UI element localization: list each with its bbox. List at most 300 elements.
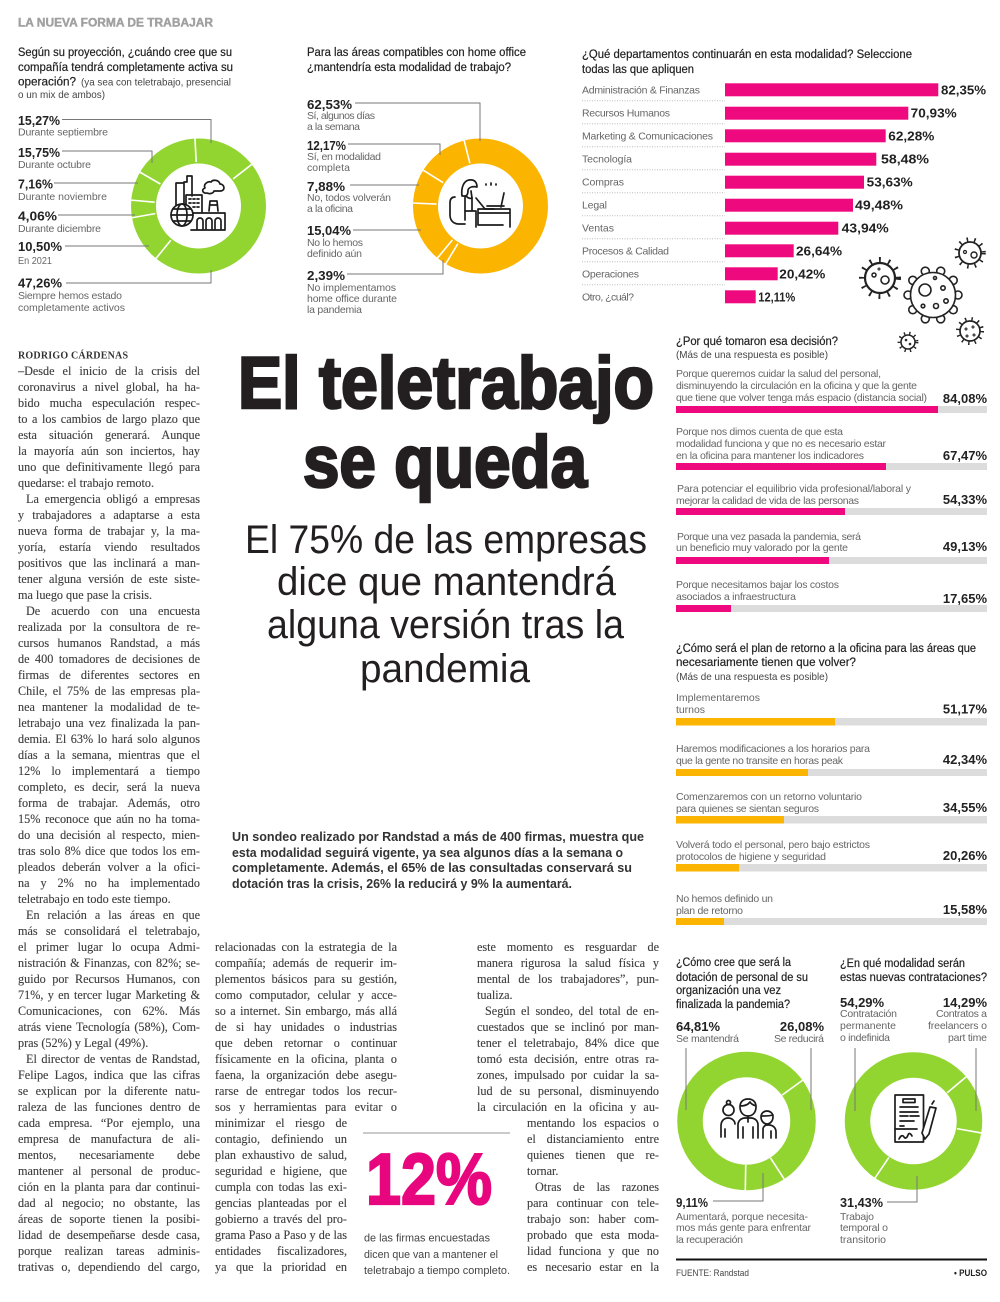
article column 1: tras solo 8% dice que todos los em- bbox=[18, 844, 200, 858]
value: septiembre: 15,27% bbox=[18, 113, 60, 128]
article column 3: tomó esta decisión, entre otras ra- bbox=[477, 1052, 659, 1066]
value: no definido: 15,04% bbox=[307, 223, 351, 238]
value: temporal: Trabajo bbox=[840, 1211, 874, 1223]
article column 2: plan exhaustivo de salud, bbox=[215, 1148, 347, 1162]
article column 1: trativas o, dependiendo del cargo, bbox=[18, 1260, 200, 1274]
question heading: organización una vez bbox=[676, 985, 781, 997]
row: Otro: 12,11% bbox=[758, 290, 796, 304]
virus bottom right bbox=[958, 319, 982, 343]
article column 1: yoría, estaría viendo resultados bbox=[18, 540, 200, 554]
heading: ¿Cómo será el plan de retorno a la oficina para las áreas que bbox=[676, 643, 976, 655]
value: no definido: definido aún bbox=[307, 248, 362, 260]
article column 1: se explican por la diferente natu- bbox=[18, 1084, 200, 1098]
value: algunos días: 62,53% bbox=[307, 97, 352, 112]
item: equilibrio vida profesional: Para potenciar el equilibrio vida profesional/laboral y bbox=[677, 483, 912, 495]
article column 1: pras (52%) y Legal (49%). bbox=[18, 1036, 148, 1050]
section header: LA NUEVA FORMA DE TRABAJAR bbox=[18, 18, 214, 30]
article column 3: tornar. bbox=[527, 1164, 558, 1178]
row: Tecnología bbox=[582, 152, 929, 166]
item: turnos bbox=[676, 692, 987, 726]
row: Procesos y Calidad bbox=[582, 244, 842, 258]
virus left bbox=[862, 260, 898, 296]
value: septiembre: Durante septiembre bbox=[18, 126, 108, 138]
question heading: ¿En qué modalidad serán bbox=[840, 958, 965, 970]
question heading: Según su proyección, ¿cuándo cree que su bbox=[18, 47, 232, 59]
article column 2: rarse de entregar todos los recur- bbox=[215, 1084, 397, 1098]
value: septiembre bbox=[18, 113, 108, 138]
row: Marketing: Marketing & Comunicaciones bbox=[582, 130, 713, 142]
row: Legal bbox=[582, 198, 903, 212]
article column 3: Según el sondeo, del total de en- bbox=[485, 1004, 659, 1018]
article column 2: plementos básicos para su gestión, bbox=[215, 972, 397, 986]
article column 1 bbox=[18, 364, 200, 1274]
value: volverán a la oficina: No, todos volverán bbox=[307, 192, 391, 204]
item: bajar costos: asociados a infraestructura bbox=[676, 591, 796, 603]
heading bbox=[676, 336, 838, 361]
question heading bbox=[582, 49, 912, 76]
article column 3: lidad funciona y que no bbox=[527, 1244, 659, 1258]
article column 3: este momento es resguardar de bbox=[477, 940, 659, 954]
row: Legal: 49,48% bbox=[855, 198, 903, 212]
value: noviembre: 7,16% bbox=[18, 176, 53, 192]
value: diciembre: Durante diciembre bbox=[18, 223, 101, 235]
row: Recursos Humanos: Recursos Humanos bbox=[582, 108, 670, 120]
article column 1: días a la semana, mientras que el bbox=[18, 748, 200, 762]
value: aumentará: mos más gente para enfrentar bbox=[676, 1222, 812, 1234]
article column 1: empresa de manufactura de ali- bbox=[18, 1132, 200, 1146]
question heading bbox=[307, 47, 526, 74]
value: modalidad completa: Sí, en modalidad bbox=[307, 151, 381, 163]
item: equilibrio vida profesional: 54,33% bbox=[943, 492, 987, 507]
value: modalidad completa: completa bbox=[307, 162, 350, 174]
value: permanente bbox=[840, 995, 897, 1044]
value: permanente: o indefinida bbox=[840, 1032, 890, 1044]
item: beneficio valorado: un beneficio muy valorado por la gente bbox=[676, 542, 848, 554]
row: Tecnología: 58,48% bbox=[881, 152, 929, 166]
callout: 12%: 12% bbox=[366, 1140, 492, 1220]
value: freelancers: freelancers o bbox=[928, 1020, 987, 1032]
article column 1: esta situación generará. Aunque bbox=[18, 428, 200, 442]
article column 3: mental de los trabajadores”, pun- bbox=[477, 972, 659, 986]
article column 1: quedarse: el trabajo remoto. bbox=[18, 476, 154, 490]
article column 3: mentando los espacios o bbox=[527, 1116, 659, 1130]
donut chart: dotación bbox=[690, 1064, 804, 1192]
article column 1: pleados deberán volver a la ofici- bbox=[18, 860, 200, 874]
value: 2021 bbox=[18, 239, 62, 267]
article column 1: nistración & Finanzas, con 82%; se- bbox=[18, 956, 200, 970]
value: permanente: Contratación bbox=[840, 1008, 897, 1020]
footer: source and brand: • PULSO bbox=[954, 1268, 987, 1279]
value: temporal: transitorio bbox=[840, 1234, 886, 1246]
subtitle: dice que mantendrá bbox=[277, 560, 617, 604]
panel: plan de retorno a la oficina bbox=[676, 643, 987, 925]
row: Procesos y Calidad: 26,64% bbox=[796, 244, 842, 258]
leader lines bbox=[54, 120, 211, 283]
value: aumentará: Aumentará, porque necesita- bbox=[676, 1211, 808, 1223]
item: salud del personal: disminuyendo la circulación en la oficina y que la gente bbox=[676, 380, 917, 392]
article column 3: quienes tienen que re- bbox=[527, 1148, 659, 1162]
subtitle: alguna versión tras la bbox=[267, 603, 625, 647]
row: Operaciones: Operaciones bbox=[582, 268, 639, 280]
article column 3: manera rigurosa la salud física y bbox=[477, 956, 659, 970]
title bbox=[238, 343, 654, 503]
article column 2: como computador, celular y acce- bbox=[215, 988, 397, 1002]
article column 1: cursos humanos Randstad, a más bbox=[18, 636, 200, 650]
article column 2: faena, la organización debe asegu- bbox=[215, 1068, 397, 1082]
value: freelancers: 14,29% bbox=[943, 995, 987, 1010]
article column 3: tualiza. bbox=[477, 988, 513, 1002]
value: aumentará: la recuperación bbox=[676, 1234, 743, 1246]
value: temporal: temporal o bbox=[840, 1222, 888, 1234]
donut chart: contrataciones bbox=[858, 1065, 983, 1180]
item: beneficio valorado: Porque una vez pasada la pandemia, será bbox=[677, 531, 861, 543]
item: modalidad funciona bbox=[676, 426, 987, 470]
question heading: operación? bbox=[18, 76, 76, 88]
article column 2: cumpla con todas las exi- bbox=[215, 1180, 347, 1194]
subtitle: El 75% de las empresas bbox=[245, 518, 647, 562]
item: salud del personal: Porque queremos cuidar la salud del personal, bbox=[676, 368, 881, 380]
value: no implementamos: home office durante bbox=[307, 293, 397, 305]
item: equilibrio vida profesional: mejorar la calidad de vida de las personas bbox=[676, 495, 859, 507]
virus large bbox=[904, 267, 962, 323]
icon: contract and pen bbox=[895, 1095, 936, 1142]
item: todo el personal: Volverá todo el personal, pero bajo estrictos bbox=[676, 839, 870, 851]
article column 3: tener el teletrabajo, 84% dice que bbox=[477, 1036, 659, 1050]
panel: cuándo estará activa la operación bbox=[18, 47, 254, 314]
article column 1: dad al negocio; no obstante, las bbox=[18, 1196, 200, 1210]
article column 1: letrabajo una vez finalizada la pan- bbox=[18, 716, 200, 730]
value: volverán a la oficina: 7,88% bbox=[307, 179, 345, 194]
article column 1: raleza de las funciones dentro de bbox=[18, 1100, 200, 1114]
lead paragraph: completamente. Además, el 65% de las consultadas conservará su bbox=[232, 860, 632, 875]
callout: 12%: teletrabajo a tiempo completo. bbox=[364, 1265, 510, 1277]
article column 1: la mayoría aún son inciertos, hay bbox=[18, 444, 200, 458]
subtitle bbox=[245, 518, 647, 691]
leader lines bbox=[686, 1048, 811, 1201]
value: se reducirá: Se reducirá bbox=[774, 1033, 824, 1045]
article column 1: Felipe Lagos, indica que las cifras bbox=[18, 1068, 200, 1082]
article column 2 bbox=[215, 940, 397, 1274]
question heading: (ya sea con teletrabajo, presencial bbox=[81, 76, 231, 88]
value: no implementamos: No implementamos bbox=[307, 282, 396, 294]
question heading bbox=[18, 47, 233, 101]
item: salud del personal bbox=[676, 368, 987, 413]
item: beneficio valorado: 49,13% bbox=[943, 539, 987, 554]
article column 1: ma luego que pase la crisis. bbox=[18, 588, 152, 602]
value: modalidad completa bbox=[307, 138, 381, 174]
item: no definido bbox=[676, 893, 987, 925]
article column 3: lud de su personal, disminuyendo bbox=[477, 1084, 659, 1098]
value: algunos días: a la semana bbox=[307, 121, 360, 133]
virus top right bbox=[956, 240, 984, 266]
article column 2: relacionadas con la estrategia de la bbox=[215, 940, 397, 954]
icon: person at desk bbox=[450, 180, 510, 227]
title: El teletrabajo bbox=[238, 343, 654, 424]
row: Compras: 53,63% bbox=[867, 174, 913, 190]
value: noviembre bbox=[18, 176, 107, 203]
value: siempre activos: 47,26% bbox=[18, 276, 62, 290]
article column 2: gencias planteadas por el bbox=[215, 1196, 347, 1210]
article column 3: cuestados que se inclinó por man- bbox=[477, 1020, 659, 1034]
value: diciembre bbox=[18, 208, 101, 235]
value: octubre: 15,75% bbox=[18, 145, 60, 160]
article column 1: demia. El 63% lo hará solo algunos bbox=[18, 732, 200, 746]
value: se reducirá bbox=[774, 1019, 824, 1045]
item: modificaciones de horarios: que la gente no transite en horas peak bbox=[676, 755, 844, 767]
question heading: ¿Qué departamentos continuarán en esta modalidad? Seleccione bbox=[582, 49, 912, 61]
lead paragraph: Un sondeo realizado por Randstad a más de 400 firmas, muestra que bbox=[232, 829, 644, 844]
value: octubre bbox=[18, 145, 91, 171]
footer: source and brand: FUENTE: Randstad bbox=[676, 1268, 749, 1279]
article column 3: trabajo son: haber com- bbox=[527, 1212, 659, 1226]
panel: mantener home office bbox=[307, 47, 536, 316]
item: retorno voluntario: para quienes se sientan seguros bbox=[676, 803, 819, 815]
row: Operaciones bbox=[582, 266, 826, 282]
article column 3 bbox=[477, 940, 659, 1274]
item: bajar costos: Porque necesitamos bajar los costos bbox=[676, 579, 839, 591]
article column 1: 71%, y en tercer lugar Marketing & bbox=[18, 988, 200, 1002]
item: modalidad funciona: modalidad funciona y que no es necesario estar bbox=[676, 438, 886, 450]
article column 1: En relación a las áreas en que bbox=[26, 908, 200, 922]
donut chart: home office bbox=[412, 139, 536, 265]
value: permanente: permanente bbox=[840, 1020, 896, 1032]
article column 1: positivos que las inclinará a man- bbox=[18, 556, 200, 570]
footer: source and brand bbox=[676, 1258, 987, 1279]
article column 1: Comunicaciones, con 62%. Más bbox=[18, 1004, 200, 1018]
value: modalidad completa: 12,17% bbox=[307, 138, 346, 153]
value: algunos días: Sí, algunos días bbox=[307, 110, 375, 122]
item: todo el personal bbox=[676, 839, 987, 872]
row: Ventas: Ventas bbox=[582, 222, 614, 234]
value: permanente: 54,29% bbox=[840, 995, 885, 1010]
row: Marketing bbox=[582, 128, 935, 144]
article column 1: El director de ventas de Randstad, bbox=[26, 1052, 200, 1066]
item: modificaciones de horarios bbox=[676, 743, 987, 776]
article column 1: nueva forma de trabajar y, la ma- bbox=[18, 524, 200, 538]
value: algunos días bbox=[307, 97, 375, 133]
heading: ¿Por qué tomaron esa decisión? bbox=[676, 336, 838, 348]
article column 2: físicamente en la oficina, planta o bbox=[215, 1052, 397, 1066]
callout: 12%: dicen que van a mantener el bbox=[364, 1249, 498, 1261]
article column 1: do una decisión al respecto, mien- bbox=[18, 828, 200, 842]
item: turnos: 51,17% bbox=[943, 702, 987, 716]
item: beneficio valorado bbox=[676, 531, 987, 564]
value: 2021: En 2021 bbox=[18, 255, 52, 267]
article column 1: La emergencia obligó a empresas bbox=[26, 492, 200, 506]
callout: 12%: de las firmas encuestadas bbox=[364, 1232, 490, 1244]
item: modalidad funciona: en la oficina para mantener los indicadores bbox=[676, 450, 864, 462]
row: Ventas bbox=[582, 220, 889, 236]
donut chart: operación activa bbox=[130, 137, 254, 261]
article column 1: más se consolidará el teletrabajo, bbox=[18, 924, 200, 938]
article column 1: mantener al personal de produc- bbox=[18, 1164, 200, 1178]
value: se mantendrá: Se mantendrá bbox=[676, 1033, 739, 1045]
heading bbox=[676, 643, 976, 683]
article column 1: forma de trabajar. Además, otro bbox=[18, 796, 200, 810]
article column 1: coronavirus a nivel global, ha ha- bbox=[18, 380, 200, 394]
article column 3: para continuar con tele- bbox=[527, 1196, 659, 1210]
row: Recursos Humanos bbox=[582, 106, 957, 120]
virus bottom left bbox=[899, 333, 917, 351]
icon: three people bbox=[721, 1099, 776, 1138]
heading: (Más de una respuesta es posible) bbox=[676, 671, 828, 683]
row: Compras bbox=[582, 174, 913, 190]
article column 1: firmas de diferentes sectores en bbox=[18, 668, 200, 682]
value: aumentará bbox=[676, 1195, 812, 1246]
item: retorno voluntario bbox=[676, 791, 987, 824]
row: Tecnología: Tecnología bbox=[582, 154, 632, 166]
leader lines bbox=[347, 103, 480, 274]
item: bajar costos bbox=[676, 579, 987, 612]
item: no definido: 15,58% bbox=[943, 902, 987, 917]
value: no definido: No lo hemos bbox=[307, 237, 363, 249]
question heading: Para las áreas compatibles con home office bbox=[307, 47, 526, 59]
row: Operaciones: 20,42% bbox=[779, 266, 826, 282]
article column 2: entidades fiscalizadores, bbox=[215, 1244, 347, 1258]
article column 2: contagio, definiendo un bbox=[215, 1132, 347, 1146]
article column 3: es necesario estar en la bbox=[527, 1260, 659, 1274]
heading: necesariamente tienen que volver? bbox=[676, 657, 856, 669]
lead paragraph bbox=[232, 829, 644, 891]
panel: modalidad de contrataciones bbox=[840, 958, 987, 1246]
article column 1: bido mucha especulación respec- bbox=[18, 396, 200, 410]
article column 1: y trabajadores a adaptarse a esta bbox=[18, 508, 200, 522]
row: Administración y Finanzas: 82,35% bbox=[941, 82, 986, 98]
article column 1: cada empresa. “Por ejemplo, una bbox=[18, 1116, 200, 1130]
article column 2: ya que la prioridad en bbox=[215, 1260, 347, 1274]
row: Ventas: 43,94% bbox=[842, 220, 889, 236]
article column 3: la circulación en la oficina y au- bbox=[477, 1100, 659, 1114]
article column 2: de si hay unidades o industrias bbox=[215, 1020, 397, 1034]
value: freelancers: Contratos a bbox=[936, 1008, 987, 1020]
value: no implementamos: la pandemia bbox=[307, 304, 362, 316]
panel: departamentos bar chart bbox=[582, 49, 986, 304]
value: siempre activos: Siempre hemos estado bbox=[18, 290, 122, 302]
value: no definido bbox=[307, 223, 363, 260]
article column 1: atrás viene Tecnología (58%), Com- bbox=[18, 1020, 200, 1034]
icon: coronavirus group bbox=[862, 240, 984, 351]
article column 3: Otras de las razones bbox=[535, 1180, 659, 1194]
item: todo el personal: protocolos de higiene y seguridad bbox=[676, 851, 826, 863]
item: turnos: turnos bbox=[676, 704, 705, 716]
article column 1: completo, es decir, será la nueva bbox=[18, 780, 200, 794]
value: temporal bbox=[840, 1195, 888, 1246]
panel: por qué tomaron esa decisión bbox=[676, 336, 987, 612]
subtitle: pandemia bbox=[360, 647, 531, 691]
item: salud del personal: que tiene que volver tenga más espacio (distancia social) bbox=[676, 392, 927, 404]
title: se queda bbox=[303, 422, 588, 503]
article column 2: minimizar el riesgo de bbox=[215, 1116, 347, 1130]
article column 2: seguridad e higiene, que bbox=[215, 1164, 347, 1178]
value: se mantendrá bbox=[676, 1019, 739, 1045]
row: Otro: Otro, ¿cuál? bbox=[582, 292, 634, 304]
lead paragraph: esta modalidad seguirá vigente, ya sea algunos días a la semana o bbox=[232, 845, 623, 860]
value: noviembre: Durante noviembre bbox=[18, 191, 107, 203]
value: se mantendrá: 64,81% bbox=[676, 1019, 720, 1034]
item: equilibrio vida profesional bbox=[676, 483, 987, 515]
icon: factory and globe bbox=[171, 176, 225, 230]
lead paragraph: dotación tras la crisis, 26% la reducirá y 9% la aumentará. bbox=[232, 876, 572, 891]
item: no definido: plan de retorno bbox=[676, 905, 743, 917]
callout: 12% bbox=[363, 1133, 510, 1277]
value: siempre activos: completamente activos bbox=[18, 302, 125, 314]
value: temporal: 31,43% bbox=[840, 1195, 883, 1210]
row: Procesos y Calidad: Procesos & Calidad bbox=[582, 246, 669, 258]
item: no definido: No hemos definido un bbox=[676, 893, 773, 905]
article column 1: lidad de desempeñarse desde casa, bbox=[18, 1228, 200, 1242]
article column 1: guido por Recursos Humanos, con bbox=[18, 972, 200, 986]
question heading: compañía tendrá completamente activa su bbox=[18, 62, 233, 74]
byline: RODRIGO CÁRDENAS bbox=[18, 350, 128, 362]
row: Recursos Humanos: 70,93% bbox=[911, 106, 957, 120]
question heading bbox=[840, 958, 987, 984]
article column 1: teletrabajo en todo este tiempo. bbox=[18, 892, 171, 906]
article column 2: sos y herramientas para evitar o bbox=[215, 1100, 397, 1114]
article column 1: 15% reconoce que aún no ha toma- bbox=[18, 812, 200, 826]
question heading: estas nuevas contrataciones? bbox=[840, 972, 987, 984]
question heading: finalizada la pandemia? bbox=[676, 999, 790, 1011]
question heading: ¿Cómo cree que será la bbox=[676, 957, 792, 969]
value: volverán a la oficina: a la oficina bbox=[307, 203, 353, 215]
article column 1: áreas de soporte tienen la posibi- bbox=[18, 1212, 200, 1226]
row: Marketing: 62,28% bbox=[888, 128, 935, 144]
value: octubre: Durante octubre bbox=[18, 159, 91, 171]
article column 1: el primer lugar lo ocupa Admi- bbox=[18, 940, 200, 954]
value: volverán a la oficina bbox=[307, 179, 391, 215]
value: freelancers bbox=[928, 995, 987, 1044]
item: modificaciones de horarios: 42,34% bbox=[943, 752, 987, 767]
item: salud del personal: 84,08% bbox=[943, 391, 987, 406]
value: aumentará: 9,11% bbox=[676, 1195, 708, 1210]
panel: dotación de personal bbox=[676, 957, 824, 1246]
article column 1: uno que definitivamente llegó para bbox=[18, 460, 200, 474]
item: modificaciones de horarios: Haremos modificaciones a los horarios para bbox=[676, 743, 870, 755]
article column 2: grama Paso a Paso y de las bbox=[215, 1228, 347, 1242]
value: se reducirá: 26,08% bbox=[780, 1019, 824, 1034]
article column 2: compañía; además de requerir im- bbox=[215, 956, 397, 970]
question heading: todas las que apliquen bbox=[582, 64, 694, 76]
item: retorno voluntario: 34,55% bbox=[943, 800, 987, 815]
article column 1: de 400 tomadores de decisiones de bbox=[18, 652, 200, 666]
article column 3: el distanciamiento entre bbox=[527, 1132, 659, 1146]
item: retorno voluntario: Comenzaremos con un retorno voluntario bbox=[676, 791, 862, 803]
article column 1: 12% lo implementará a tiempo bbox=[18, 764, 200, 778]
dotted rows bbox=[582, 101, 725, 285]
article column 1: na y 2% no ha implementado bbox=[18, 876, 200, 890]
article column 1: tener alguna versión de este siste- bbox=[18, 572, 200, 586]
article column 2: gobierno a través del pro- bbox=[215, 1212, 347, 1226]
article column 2: que deben retornar o continuar bbox=[215, 1036, 397, 1050]
row: Legal: Legal bbox=[582, 200, 607, 212]
article column 1: realizada por la consultora de re- bbox=[18, 620, 200, 634]
row: Compras: Compras bbox=[582, 176, 624, 188]
article column 1: to a los cambios de largo plazo que bbox=[18, 412, 200, 426]
heading: (Más de una respuesta es posible) bbox=[676, 349, 828, 361]
value: freelancers: part time bbox=[948, 1032, 987, 1044]
question heading: ¿mantendría esta modalidad de trabajo? bbox=[307, 62, 511, 74]
article column 1: –Desde el inicio de la crisis del bbox=[18, 364, 200, 378]
article column 3: zones, impulsado por cuidar la sa- bbox=[477, 1068, 659, 1082]
value: no implementamos bbox=[307, 268, 397, 316]
article column 1: nea mantener la modalidad de te- bbox=[18, 700, 200, 714]
leader lines bbox=[855, 1048, 976, 1202]
question heading bbox=[676, 957, 808, 1011]
question heading: dotación de personal de su bbox=[676, 972, 808, 984]
row: Otro bbox=[582, 290, 796, 304]
article column 1: Chile, el 75% de las empresas pla- bbox=[18, 684, 200, 698]
article column 3: probado que esta moda- bbox=[527, 1228, 659, 1242]
value: diciembre: 4,06% bbox=[18, 208, 57, 224]
